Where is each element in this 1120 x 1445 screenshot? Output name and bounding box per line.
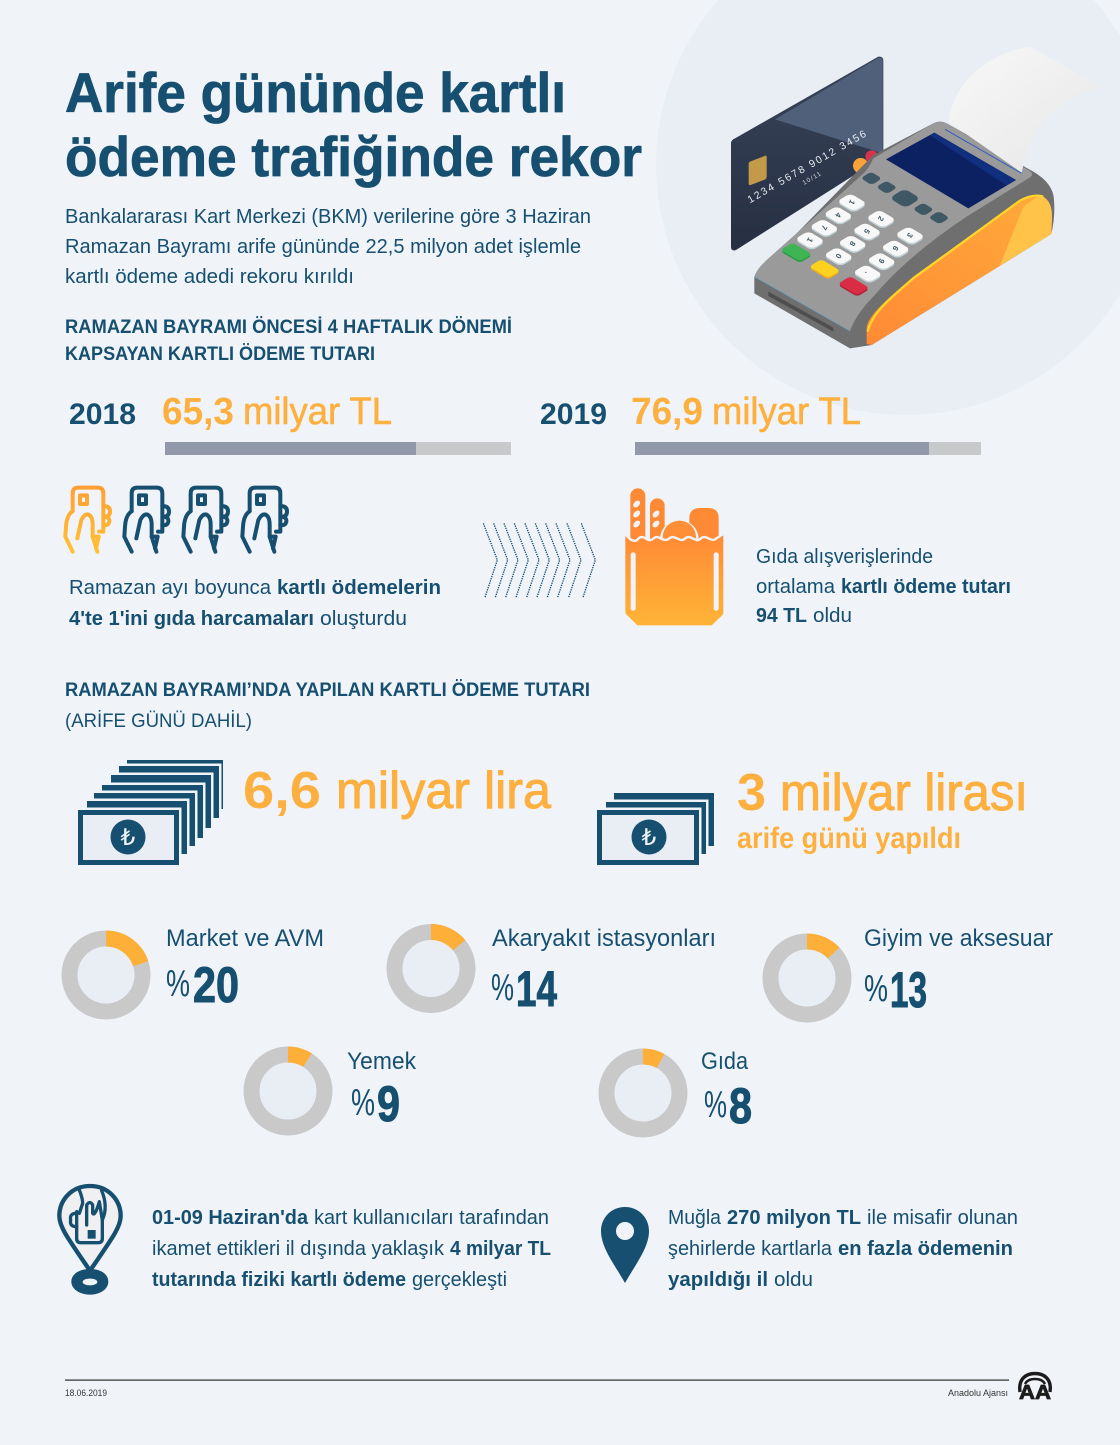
donut: fuel [394,932,468,1005]
keypad: 7 [819,223,829,232]
label: food: % [704,1084,727,1126]
icon: large stack of banknotes: ₺ [121,824,136,850]
text: food share: kartlı ödemelerin [277,577,441,599]
intro text: kartlı ödeme adedi rekoru kırıldı [65,266,354,288]
donut: clothing [770,942,844,1014]
logo: Anadolu Agency: AA [1019,1382,1051,1404]
text: Muğla: yapıldığı il [668,1269,768,1291]
heading: holiday payments: (ARİFE GÜNÜ DAHİL) [65,711,252,732]
text: out-of-city spending: gerçekleşti [412,1269,507,1291]
keypad: 8 [847,239,857,248]
text: food share: Ramazan ayı boyunca [69,577,272,599]
donut: market [70,938,142,1012]
text: out-of-city spending: 4 milyar TL [450,1238,551,1260]
heading: four-week period: RAMAZAN BAYRAMI ÖNCESİ 4 HAFTALIK DÖNEMİ [65,317,512,338]
icon: small stack of banknotes [594,793,714,868]
text: out-of-city spending: tutarında fiziki kartlı ödeme [152,1269,406,1291]
icon: grocery bag [625,488,723,625]
label: market: Market ve AVM [166,925,324,952]
text: average food payment [756,546,1011,627]
text: Muğla: Muğla [668,1207,722,1229]
label: market [166,925,324,1013]
title: ödeme trafiğinde rekor [65,125,642,188]
keypad: . [863,270,872,276]
text: average food payment: ortalama [756,576,836,598]
stat: 3 billion on eve [737,764,1028,855]
label: restaurants: % [351,1082,375,1124]
text: Muğla: en fazla ödemenin [838,1238,1013,1260]
arrow: dotted chevrons [483,523,595,597]
label: restaurants [347,1048,417,1132]
label: fuel: 14 [516,961,557,1017]
stat: 3 billion on eve: milyar lirası [780,764,1028,822]
text: Muğla: ile misafir olunan [867,1207,1018,1229]
text: food share [69,577,441,630]
label: clothing [864,925,1053,1018]
footer date: 18.06.2019 [65,1388,107,1398]
label: food [701,1048,752,1134]
stat: 2019 [540,391,981,455]
credit card: 1234 5678 9012 3456 [746,129,869,206]
label: clothing: 13 [890,962,927,1018]
keypad: 1 [805,236,815,245]
text: out-of-city spending: ikamet ettikleri il dışında yaklaşık [152,1238,445,1260]
title [65,61,642,188]
stat: 2018: milyar TL [243,391,392,433]
text: average food payment: oldu [813,605,852,627]
keypad: 1 [847,198,857,207]
label: restaurants: Yemek [347,1048,417,1075]
text: out-of-city spending [152,1207,551,1291]
screen [886,129,1022,208]
bar: 2019 [635,442,981,455]
icon: four hands holding cards [65,488,287,552]
stat: 2018: 65,3 [162,391,234,433]
heading: four-week period [65,317,512,365]
text: average food payment: Gıda alışverişlerinde [756,546,933,568]
keypad: 2 [876,214,886,223]
credit card: 10/11 [801,170,823,187]
keypad [781,172,950,297]
label: fuel: Akaryakıt istasyonları [492,925,716,952]
donut: restaurants [252,1054,324,1128]
credit card [731,57,883,250]
text: Muğla: şehirlerde kartlarla [668,1238,833,1260]
label: clothing: % [864,968,888,1010]
title: Arife gününde kartlı [65,61,566,124]
heading: holiday payments: RAMAZAN BAYRAMI’NDA YAPILAN KARTLI ÖDEME TUTARI [65,680,590,701]
text: food share: 4'te 1'ini gıda harcamaları [69,608,314,630]
stat: 6.6 billion lira: milyar lira [336,762,551,820]
receipt paper [948,47,1103,173]
stat: 6.6 billion lira [243,762,551,820]
terminal body [754,122,1054,348]
text: out-of-city spending: 01-09 Haziran'da [152,1207,309,1229]
footer rule [65,1380,1009,1381]
text: Muğla: oldu [774,1269,813,1291]
donut: food [606,1056,680,1130]
stat: 3 billion on eve: 3 [737,764,766,822]
keypad: 5 [862,227,872,236]
text: out-of-city spending: kart kullanıcıları tarafından [314,1207,549,1229]
stat: 2018 [69,391,511,455]
stat: 3 billion on eve: arife günü yapıldı [737,822,961,855]
keypad: 6 [891,244,900,252]
intro text: Ramazan Bayramı arife gününde 22,5 milyon adet işlemle [65,236,581,258]
icon: location pin [601,1207,649,1283]
illustration: card terminal with credit card [731,47,1103,348]
background circle [656,0,1120,415]
icon: small stack of banknotes: ₺ [642,824,657,850]
bar: 2018 [165,442,511,455]
label: market: 20 [193,957,239,1013]
heading: four-week period: KAPSAYAN KARTLI ÖDEME TUTARI [65,344,375,365]
keypad: 4 [833,211,843,220]
label: restaurants: 9 [377,1076,400,1132]
icon: map pin with hand and card [59,1186,121,1295]
text: Muğla [668,1207,1018,1291]
text: average food payment: kartlı ödeme tutarı [841,576,1011,598]
label: fuel [491,925,716,1017]
stat: 2019: 76,9 [631,391,703,433]
stat: 2019: 2019 [540,398,607,431]
stat: 2019: milyar TL [712,391,861,433]
label: fuel: % [491,967,514,1009]
label: clothing: Giyim ve aksesuar [864,925,1053,952]
stat: 6.6 billion lira: 6,6 [243,762,321,820]
label: food: Gıda [701,1048,749,1075]
text: Muğla: 270 milyon TL [727,1207,861,1229]
icon: large stack of banknotes [76,760,223,868]
intro text [65,206,591,288]
text: average food payment: 94 TL [756,605,807,627]
label: food: 8 [729,1078,752,1134]
label: market: % [166,963,190,1005]
stat: 2018: 2018 [69,398,136,431]
footer source: Anadolu Ajansı [948,1388,1008,1398]
keypad: 0 [834,252,843,260]
intro text: Bankalararası Kart Merkezi (BKM) verilerine göre 3 Haziran [65,206,591,228]
text: food share: oluşturdu [320,608,407,630]
keypad: 9 [877,257,886,265]
logo: Anadolu Agency [1019,1374,1051,1404]
keypad: 3 [905,231,915,239]
orange grip [867,196,1052,345]
heading: holiday payments [65,680,590,732]
